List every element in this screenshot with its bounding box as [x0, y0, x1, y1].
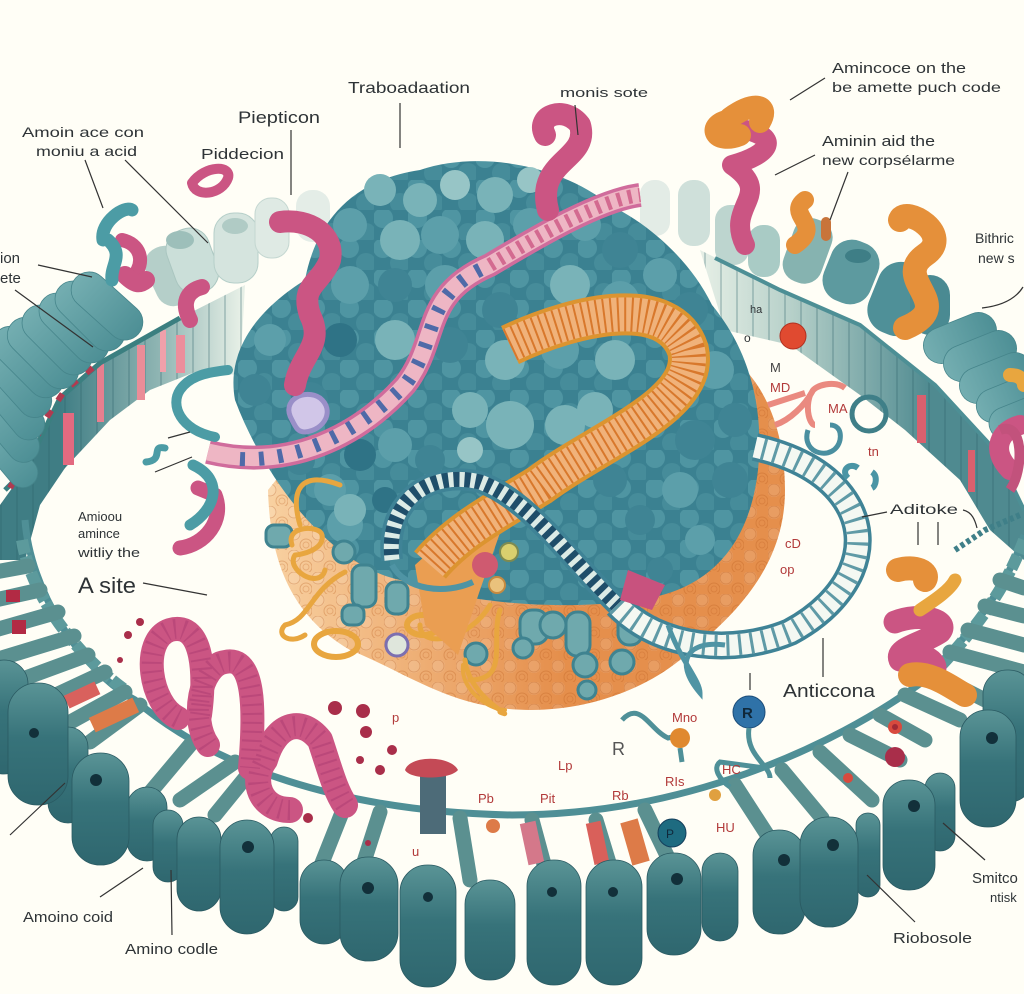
label: new corpsélarme: new corpsélarme — [822, 152, 955, 168]
label: be amette puch code: be amette puch code — [832, 79, 1001, 95]
small red letters: Pit — [540, 791, 556, 806]
small red letters: HC — [722, 762, 741, 777]
small red letters: Lp — [558, 758, 572, 773]
gold curled strands — [282, 480, 505, 714]
ring: upper-right columns — [700, 250, 1024, 560]
back wall tubes, right — [640, 180, 950, 343]
teal tRNA ladder — [391, 447, 858, 693]
label: Amoino coid: Amoino coid — [23, 909, 113, 926]
icon: ring — [852, 397, 886, 431]
small red letters: Rb — [612, 788, 629, 803]
small red letters: o — [744, 331, 751, 345]
label: new s: new s — [978, 250, 1015, 266]
ring: lower rail — [22, 520, 1024, 815]
icon: small curls — [845, 466, 876, 488]
label: Amino codle: Amino codle — [125, 941, 218, 958]
small red letters: p — [392, 710, 399, 725]
small red letters: op — [780, 562, 794, 577]
label: Aditoke: Aditoke — [890, 501, 958, 517]
pink mRNA ribbon — [208, 195, 640, 459]
label: Traboadaation: Traboadaation — [348, 80, 470, 97]
icon: red ball — [780, 323, 806, 349]
red amino acid dots — [117, 618, 397, 846]
small red letters: P — [666, 827, 674, 841]
connector molecule — [622, 713, 770, 787]
small red letters: RIs — [665, 774, 685, 789]
icon: hook — [807, 425, 840, 453]
label: ete: ete — [0, 270, 21, 287]
small red letters: Pb — [478, 791, 494, 806]
label: Amincoce on the: Amincoce on the — [832, 60, 966, 77]
lavender ring — [289, 394, 327, 432]
small red letters: MA — [828, 401, 848, 416]
small red letters: HU — [716, 820, 735, 835]
label: moniu a acid: moniu a acid — [36, 143, 137, 159]
pink and orange coils — [103, 107, 1024, 810]
teal and silver rounded units at the base — [266, 525, 642, 699]
small red letters: R — [742, 705, 753, 722]
ring: left and right rungs — [0, 566, 1024, 767]
ring: bottom rungs — [148, 745, 872, 880]
small red letters — [392, 304, 879, 859]
label: Piddecion: Piddecion — [201, 146, 284, 163]
small red letters: R — [612, 739, 625, 759]
orange mass — [268, 360, 785, 710]
icon: pink scissors shape — [768, 384, 845, 425]
teal ribosome mass — [233, 161, 759, 605]
label: Amioou amince witliy the: Amioou — [78, 509, 122, 524]
ring: left capsules — [0, 265, 150, 494]
label: Amioou amince witliy the: witliy the — [77, 545, 140, 560]
label: A site: A site — [78, 573, 136, 598]
small molecule details — [405, 323, 1020, 847]
label: Amioou amince witliy the: amince — [78, 526, 120, 541]
small red letters: Mno — [672, 710, 697, 725]
small red letters: M — [770, 360, 781, 375]
icon: P ball — [658, 819, 686, 847]
icon: orange bead — [670, 728, 690, 748]
ring: upper-left columns — [0, 285, 245, 560]
label: Aminin aid the: Aminin aid the — [822, 133, 935, 150]
small red letters: tn — [868, 444, 879, 459]
stacked protein column — [420, 772, 446, 834]
label: Riobosole: Riobosole — [893, 930, 972, 947]
small red letters: ha — [750, 304, 763, 316]
small red letters: cD — [785, 536, 801, 551]
ring: bottom capsules — [0, 660, 1024, 987]
label: monis sote: monis sote — [560, 85, 648, 100]
back wall tubes, left — [139, 190, 330, 312]
label: Amioou amince witliy the — [77, 509, 140, 560]
small red letters: MD — [770, 380, 790, 395]
label: ion: ion — [0, 250, 20, 267]
red knot on the ribbon — [472, 543, 518, 593]
small red letters: u — [412, 844, 419, 859]
ring: right capsules — [918, 307, 1024, 444]
label: Piepticon: Piepticon — [238, 108, 320, 127]
pink knot right edge — [1000, 429, 1019, 490]
icon: R ball — [733, 696, 765, 728]
label: ntisk: ntisk — [990, 890, 1017, 905]
label: Bithric: Bithric — [975, 230, 1014, 246]
adenine attachment — [955, 515, 1020, 550]
label: Amoin ace con: Amoin ace con — [22, 124, 144, 140]
icon: red cap — [405, 759, 458, 778]
orange ribbon — [415, 314, 689, 655]
label: Smitco: Smitco — [972, 870, 1018, 887]
label: Anticcona: Anticcona — [783, 681, 876, 701]
